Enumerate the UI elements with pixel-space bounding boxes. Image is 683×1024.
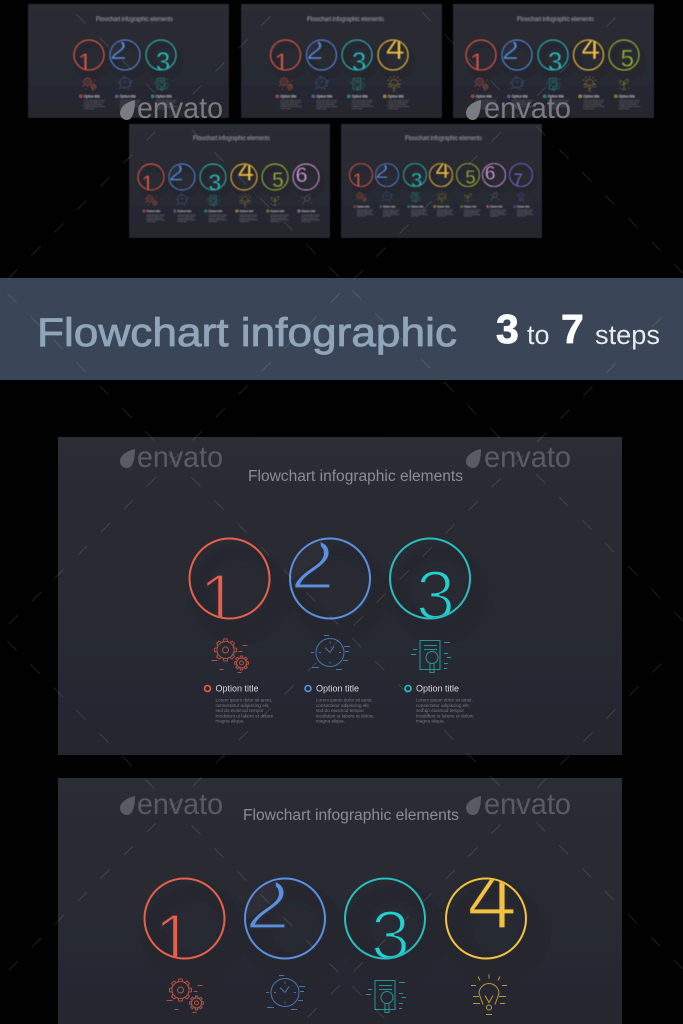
step 2: consectetur adipiscing elit, xyxy=(120,101,140,104)
step 2 xyxy=(304,35,338,110)
step 4: Lorem ipsum dolor sit amet, xyxy=(437,208,454,211)
step 1 xyxy=(466,40,497,110)
step 2: consectetur adipiscing elit, xyxy=(383,210,399,213)
step 2: Lorem ipsum dolor sit amet, xyxy=(120,99,141,102)
step 5: Option title xyxy=(270,209,285,213)
step 4: 4 xyxy=(238,155,254,187)
step 3: Option title xyxy=(208,209,223,213)
step 3: sed do eiusmod tempor xyxy=(156,103,174,106)
step 4 xyxy=(430,156,454,217)
option body: Lorem ipsum dolor sit amet, xyxy=(316,698,373,702)
step 5: 5 xyxy=(621,45,634,72)
step 2: sed do eiusmod tempor xyxy=(177,217,193,220)
step 2: Option title xyxy=(512,94,528,98)
numeral: 4 xyxy=(467,848,517,948)
step 1: 1 xyxy=(274,48,289,78)
step 3: Option title xyxy=(352,94,368,98)
step 3: Lorem ipsum dolor sit amet, xyxy=(548,99,569,102)
step 5 xyxy=(609,40,640,110)
banner steps text: steps xyxy=(595,320,660,350)
step 4: sed do eiusmod tempor xyxy=(388,103,406,106)
step 3: consectetur adipiscing elit, xyxy=(208,215,226,218)
step 3: magna aliqua. xyxy=(156,108,167,110)
step 6 xyxy=(482,164,507,217)
thumbnail title: Flowchart infographic elements xyxy=(96,17,173,23)
step 2 xyxy=(167,161,196,223)
step 3 xyxy=(538,40,569,110)
step 1 xyxy=(74,40,105,110)
step 3 xyxy=(404,164,428,217)
step 1 xyxy=(138,164,165,223)
icon: gears xyxy=(166,979,204,1012)
step 1 xyxy=(350,164,374,217)
step 4: consectetur adipiscing elit, xyxy=(388,101,408,104)
step 4 xyxy=(231,155,258,223)
step 3: magna aliqua. xyxy=(352,108,363,110)
step 1: incididunt ut labore et dolore xyxy=(476,105,497,108)
step 3: Option title xyxy=(548,94,564,98)
option body: magna aliqua. xyxy=(316,718,345,724)
icon: clock xyxy=(311,636,350,670)
step 1: Lorem ipsum dolor sit amet, xyxy=(476,99,497,102)
panel title: Flowchart infographic elements xyxy=(243,807,459,824)
step 1: Lorem ipsum dolor sit amet, xyxy=(146,213,165,216)
step 3: magna aliqua. xyxy=(208,221,218,223)
step 3: magna aliqua. xyxy=(411,215,420,217)
step 3: 3 xyxy=(411,170,422,192)
step 4: Lorem ipsum dolor sit amet, xyxy=(388,99,409,102)
banner title: Flowchart infographic xyxy=(37,311,457,355)
step 2: Option title xyxy=(177,209,192,213)
step 4: Option title xyxy=(583,94,599,98)
bullet xyxy=(204,686,210,692)
step 3 xyxy=(342,40,373,110)
panel: 4 step flowchart xyxy=(58,778,622,1024)
step 6: magna aliqua. xyxy=(301,221,311,223)
step 6: magna aliqua. xyxy=(490,215,499,217)
option body: consectetur adipiscing elit, xyxy=(416,703,470,708)
thumbnail title: Flowchart infographic elements xyxy=(405,136,482,142)
numeral: 1 xyxy=(200,560,238,638)
thumbnail title: Flowchart infographic elements xyxy=(193,136,270,142)
step 3: Lorem ipsum dolor sit amet, xyxy=(411,208,428,211)
numeral: 3 xyxy=(371,896,410,974)
step 3: 3 xyxy=(208,169,221,195)
step 3: sed do eiusmod tempor xyxy=(352,103,370,106)
step 2: consectetur adipiscing elit, xyxy=(316,101,337,104)
step 6 xyxy=(293,163,320,223)
step 4 xyxy=(446,848,526,1014)
step 5: magna aliqua. xyxy=(270,221,280,223)
step 1: sed do eiusmod tempor xyxy=(84,103,102,106)
step 4: incididunt ut labore et dolore xyxy=(583,105,605,108)
step 4: Lorem ipsum dolor sit amet, xyxy=(583,99,605,102)
step 4: 4 xyxy=(386,29,405,67)
icon: light bulb xyxy=(471,974,507,1014)
step 6: 6 xyxy=(485,164,495,185)
step 3: incididunt ut labore et dolore xyxy=(208,219,227,222)
step 1: Option title xyxy=(476,94,492,98)
step 1: 1 xyxy=(78,48,92,78)
step 2: sed do eiusmod tempor xyxy=(316,103,335,106)
step 3: 3 xyxy=(352,46,366,76)
step 1: consectetur adipiscing elit, xyxy=(357,210,373,213)
numeral xyxy=(291,540,330,588)
step 2: 2 xyxy=(169,161,184,186)
step 2 xyxy=(374,159,400,217)
step 4: magna aliqua. xyxy=(437,215,446,217)
step 7: sed do eiusmod tempor xyxy=(517,211,531,214)
step 1: Option title xyxy=(84,94,100,98)
thumbnail title: Flowchart infographic elements xyxy=(307,17,384,23)
thumbnail panel: 5 steps xyxy=(453,4,654,118)
step 6: consectetur adipiscing elit, xyxy=(301,215,319,218)
step 5: Option title xyxy=(464,204,477,208)
step 3: sed do eiusmod tempor xyxy=(411,211,425,214)
step 1: Lorem ipsum dolor sit amet, xyxy=(84,99,105,102)
step 2: 2 xyxy=(502,35,519,64)
step 3: 3 xyxy=(156,46,170,76)
step 2 xyxy=(108,35,141,110)
step 3: Option title xyxy=(411,204,424,208)
bullet xyxy=(305,686,311,692)
step 4 xyxy=(574,29,605,110)
step 2: magna aliqua. xyxy=(177,221,187,223)
step 5: consectetur adipiscing elit, xyxy=(270,215,288,218)
step 2: consectetur adipiscing elit, xyxy=(512,101,532,104)
step 1 xyxy=(190,538,274,724)
banner steps text: 3 xyxy=(496,306,519,352)
icon: gears xyxy=(212,639,248,672)
step 4: consectetur adipiscing elit, xyxy=(239,215,257,218)
step 2: Lorem ipsum dolor sit amet, xyxy=(177,213,196,216)
option body: sed do eiusmod tempor xyxy=(416,708,464,713)
step 2: incididunt ut labore et dolore xyxy=(120,105,141,108)
step 5: magna aliqua. xyxy=(619,108,630,110)
step 5: sed do eiusmod tempor xyxy=(464,211,478,214)
step 3: sed do eiusmod tempor xyxy=(548,103,566,106)
step 2: incididunt ut labore et dolore xyxy=(316,105,338,108)
banner steps text: 7 xyxy=(561,306,584,352)
step 1: 1 xyxy=(141,170,154,196)
option body: incididunt ut labore et dolore xyxy=(216,714,274,718)
step 4: magna aliqua. xyxy=(583,108,595,110)
number circle xyxy=(144,878,224,958)
step 5: incididunt ut labore et dolore xyxy=(464,213,481,216)
icon: document search xyxy=(366,980,406,1012)
step 2: Lorem ipsum dolor sit amet, xyxy=(383,208,400,211)
step 1: consectetur adipiscing elit, xyxy=(84,101,104,104)
step 5: magna aliqua. xyxy=(464,215,473,217)
step 3: incididunt ut labore et dolore xyxy=(548,105,569,108)
step 2: Option title xyxy=(120,94,136,98)
step 2: incididunt ut labore et dolore xyxy=(512,105,533,108)
step 4: sed do eiusmod tempor xyxy=(239,217,255,220)
step 6: Option title xyxy=(301,209,316,213)
watermark: envato panel 2 right: envato xyxy=(484,788,571,821)
step 4: sed do eiusmod tempor xyxy=(583,103,602,106)
step 2 xyxy=(289,538,374,724)
step 7 xyxy=(510,164,534,217)
step 1: consectetur adipiscing elit, xyxy=(280,101,301,104)
option title: Option title xyxy=(416,684,459,694)
step 2: magna aliqua. xyxy=(512,108,523,110)
step 5: incididunt ut labore et dolore xyxy=(619,105,640,108)
step 1: magna aliqua. xyxy=(280,108,292,110)
thumbnail group: 3 to 7 step previews xyxy=(28,4,654,238)
banner xyxy=(0,278,683,380)
step 4: Option title xyxy=(239,209,254,213)
step 1: magna aliqua. xyxy=(357,215,366,217)
step 2: 2 xyxy=(306,35,323,64)
step 1: magna aliqua. xyxy=(476,108,487,110)
step 1: incididunt ut labore et dolore xyxy=(280,105,302,108)
step 1: 1 xyxy=(470,48,484,78)
step 4: consectetur adipiscing elit, xyxy=(437,210,453,213)
option body: consectetur adipiscing elit, xyxy=(216,703,269,708)
step 2: magna aliqua. xyxy=(120,108,131,110)
step 1: incididunt ut labore et dolore xyxy=(357,213,374,216)
step 3: consectetur adipiscing elit, xyxy=(156,101,176,104)
step 5: 5 xyxy=(465,167,476,188)
step 2: sed do eiusmod tempor xyxy=(383,211,397,214)
option title: Option title xyxy=(316,684,359,694)
step 2: magna aliqua. xyxy=(383,215,392,217)
step 5: sed do eiusmod tempor xyxy=(619,103,637,106)
step 1: sed do eiusmod tempor xyxy=(476,103,494,106)
step 2: 2 xyxy=(376,159,388,183)
step 6: 6 xyxy=(296,163,308,187)
step 5: 5 xyxy=(272,169,284,192)
step 3: magna aliqua. xyxy=(548,108,559,110)
step 5: Lorem ipsum dolor sit amet, xyxy=(464,208,481,211)
step 4: Lorem ipsum dolor sit amet, xyxy=(239,213,258,216)
step 3: Lorem ipsum dolor sit amet, xyxy=(208,213,227,216)
step 5: consectetur adipiscing elit, xyxy=(619,101,639,104)
step 1: Lorem ipsum dolor sit amet, xyxy=(280,99,302,102)
watermark: envato panel 2 left: envato xyxy=(137,788,223,821)
option body: magna aliqua. xyxy=(216,718,244,724)
number circle xyxy=(390,538,470,618)
number circle xyxy=(446,878,526,958)
step 4: consectetur adipiscing elit, xyxy=(583,101,604,104)
step 1: incididunt ut labore et dolore xyxy=(146,219,165,222)
step 7: Option title xyxy=(517,204,530,208)
step 3 xyxy=(200,164,227,223)
step 3 xyxy=(390,538,474,724)
step 6: incididunt ut labore et dolore xyxy=(490,213,507,216)
step 2 xyxy=(239,865,325,1010)
step 5: Lorem ipsum dolor sit amet, xyxy=(270,213,289,216)
number circle xyxy=(290,538,370,618)
step 5: consectetur adipiscing elit, xyxy=(464,210,480,213)
number circle xyxy=(345,878,425,958)
step 2: incididunt ut labore et dolore xyxy=(177,219,196,222)
step 5: Option title xyxy=(619,94,635,98)
step 1: 1 xyxy=(352,171,364,193)
banner steps text: to xyxy=(527,320,550,350)
step 4: incididunt ut labore et dolore xyxy=(239,219,258,222)
step 1: sed do eiusmod tempor xyxy=(357,211,371,214)
watermark: envato panel 1 left: envato xyxy=(137,441,223,474)
numeral: 1 xyxy=(154,900,193,978)
step 5 xyxy=(262,164,289,223)
step 3: 3 xyxy=(548,46,562,76)
step 3: incididunt ut labore et dolore xyxy=(352,105,373,108)
option body: sed do eiusmod tempor xyxy=(216,708,264,713)
thumbnail title: Flowchart infographic elements xyxy=(517,17,594,23)
step 4: magna aliqua. xyxy=(388,108,399,110)
option body: magna aliqua. xyxy=(416,718,445,724)
step 6: consectetur adipiscing elit, xyxy=(490,210,506,213)
step 2: sed do eiusmod tempor xyxy=(512,103,530,106)
step 5: incididunt ut labore et dolore xyxy=(270,219,289,222)
step 4: magna aliqua. xyxy=(239,221,249,223)
step 1: Lorem ipsum dolor sit amet, xyxy=(357,208,374,211)
step 7: Lorem ipsum dolor sit amet, xyxy=(517,208,534,211)
numeral: 2 xyxy=(290,525,335,603)
step 2: Option title xyxy=(316,94,332,98)
step 4: Option title xyxy=(437,204,450,208)
option body: sed do eiusmod tempor xyxy=(316,708,364,713)
step 3: consectetur adipiscing elit, xyxy=(352,101,372,104)
step 2 xyxy=(500,35,533,110)
step 3: Lorem ipsum dolor sit amet, xyxy=(156,99,177,102)
step 4: 4 xyxy=(436,156,450,184)
step 4: incididunt ut labore et dolore xyxy=(388,105,409,108)
step 4: Option title xyxy=(388,94,404,98)
icon: document search xyxy=(411,640,451,672)
step 1 xyxy=(144,878,224,1012)
thumbnail panel: 4 steps xyxy=(241,4,442,118)
step 2: consectetur adipiscing elit, xyxy=(177,215,195,218)
step 1: incididunt ut labore et dolore xyxy=(84,105,105,108)
number circle xyxy=(245,878,325,958)
thumbnail panel: 3 steps xyxy=(28,4,229,118)
step 6: Lorem ipsum dolor sit amet, xyxy=(301,213,320,216)
option body: Lorem ipsum dolor sit amet, xyxy=(216,698,272,702)
panel: 3 step flowchart xyxy=(58,437,622,755)
step 6: sed do eiusmod tempor xyxy=(490,211,504,214)
panel title: Flowchart infographic elements xyxy=(248,468,463,485)
option body: incididunt ut labore et dolore xyxy=(316,714,374,718)
step 3: sed do eiusmod tempor xyxy=(208,217,224,220)
number circle xyxy=(190,538,270,618)
step 6: Lorem ipsum dolor sit amet, xyxy=(490,208,507,211)
bullet xyxy=(405,686,411,692)
step 5: Lorem ipsum dolor sit amet, xyxy=(619,99,640,102)
step 2: Lorem ipsum dolor sit amet, xyxy=(512,99,533,102)
option body: incididunt ut labore et dolore xyxy=(416,714,474,718)
step 5 xyxy=(456,164,481,217)
thumbnail panel: 6 steps xyxy=(129,124,330,238)
step 1: magna aliqua. xyxy=(146,221,156,223)
option title: Option title xyxy=(216,684,259,694)
step 3: Lorem ipsum dolor sit amet, xyxy=(352,99,373,102)
step 1: magna aliqua. xyxy=(84,108,95,110)
step 5: sed do eiusmod tempor xyxy=(270,217,286,220)
step 1: consectetur adipiscing elit, xyxy=(146,215,164,218)
step 4 xyxy=(378,29,409,110)
step 3 xyxy=(146,40,177,110)
step 1: sed do eiusmod tempor xyxy=(146,217,162,220)
step 2: Lorem ipsum dolor sit amet, xyxy=(316,99,338,102)
step 2: 2 xyxy=(110,35,127,64)
step 2: Option title xyxy=(383,204,396,208)
step 6: sed do eiusmod tempor xyxy=(301,217,317,220)
step 3 xyxy=(345,878,425,1012)
step 1: consectetur adipiscing elit, xyxy=(476,101,496,104)
numeral: 3 xyxy=(416,556,455,634)
numeral: 2 xyxy=(245,865,290,943)
step 1: Option title xyxy=(357,204,370,208)
step 4: incididunt ut labore et dolore xyxy=(437,213,454,216)
step 6: Option title xyxy=(490,204,503,208)
step 7: 7 xyxy=(513,169,523,189)
step 2: incididunt ut labore et dolore xyxy=(383,213,400,216)
step 1: Option title xyxy=(280,94,296,98)
step 3: incididunt ut labore et dolore xyxy=(411,213,428,216)
step 4: 4 xyxy=(581,29,600,67)
step 3: incididunt ut labore et dolore xyxy=(156,105,177,108)
step 3: Option title xyxy=(156,94,172,98)
step 4: sed do eiusmod tempor xyxy=(437,211,451,214)
step 6: incididunt ut labore et dolore xyxy=(301,219,320,222)
step 1: sed do eiusmod tempor xyxy=(280,103,299,106)
watermark: envato panel 1 right: envato xyxy=(484,441,571,474)
step 2: magna aliqua. xyxy=(316,108,328,110)
step 3: consectetur adipiscing elit, xyxy=(411,210,427,213)
watermark: envato top left: envato xyxy=(137,92,223,125)
step 7: incididunt ut labore et dolore xyxy=(517,213,534,216)
step 3: consectetur adipiscing elit, xyxy=(548,101,568,104)
banner steps text xyxy=(496,306,660,352)
icon: clock xyxy=(266,976,305,1010)
step 7: magna aliqua. xyxy=(517,215,526,217)
option body: consectetur adipiscing elit, xyxy=(316,703,370,708)
step 2: sed do eiusmod tempor xyxy=(120,103,138,106)
step 1 xyxy=(270,40,302,110)
step 7: consectetur adipiscing elit, xyxy=(517,210,533,213)
thumbnail panel: 7 steps xyxy=(341,124,542,238)
step 1: Option title xyxy=(146,209,161,213)
watermark: envato top right: envato xyxy=(484,92,571,125)
option body: Lorem ipsum dolor sit amet, xyxy=(416,698,473,702)
